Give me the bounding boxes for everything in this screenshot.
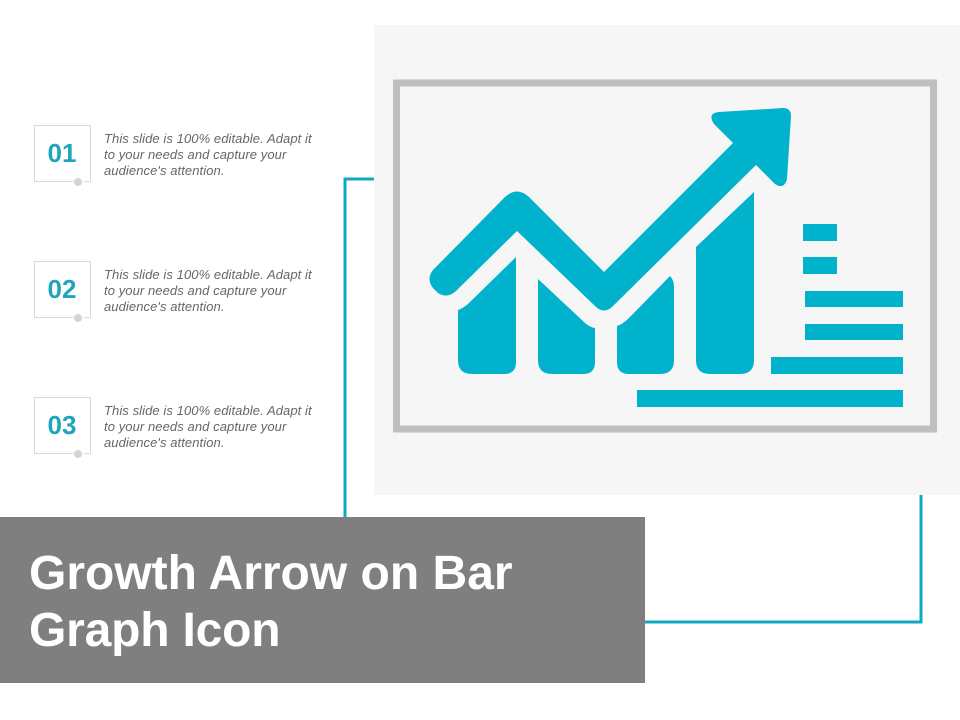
bar 1 [458, 257, 516, 374]
item 03: audience's attention. [104, 435, 225, 450]
legend bars [637, 224, 903, 407]
item 02: to your needs and capture your [104, 283, 286, 298]
title: Growth Arrow on Bar [29, 547, 513, 600]
bar 3 [617, 276, 674, 374]
bar 2 [538, 279, 595, 374]
item 01 [34, 125, 312, 186]
icon frame [396, 83, 934, 429]
item 01: to your needs and capture your [104, 147, 286, 162]
bar 4 [696, 192, 754, 374]
title [29, 547, 513, 657]
item 01: 01 [48, 138, 76, 168]
item 01: audience's attention. [104, 163, 225, 178]
panel: icon background [374, 25, 960, 495]
title banner [0, 517, 645, 683]
item 02: audience's attention. [104, 299, 225, 314]
item 02: 02 [48, 274, 76, 304]
item 02 [34, 261, 312, 322]
title: Graph Icon [29, 604, 280, 657]
growth arrow [430, 108, 791, 310]
item 02: This slide is 100% editable. Adapt it [104, 267, 312, 282]
item 03 [34, 397, 312, 458]
icon: growth arrow on bar graph [393, 80, 937, 432]
item 01: This slide is 100% editable. Adapt it [104, 131, 312, 146]
item 03: This slide is 100% editable. Adapt it [104, 403, 312, 418]
item 03: 03 [48, 410, 76, 440]
item 03: to your needs and capture your [104, 419, 286, 434]
